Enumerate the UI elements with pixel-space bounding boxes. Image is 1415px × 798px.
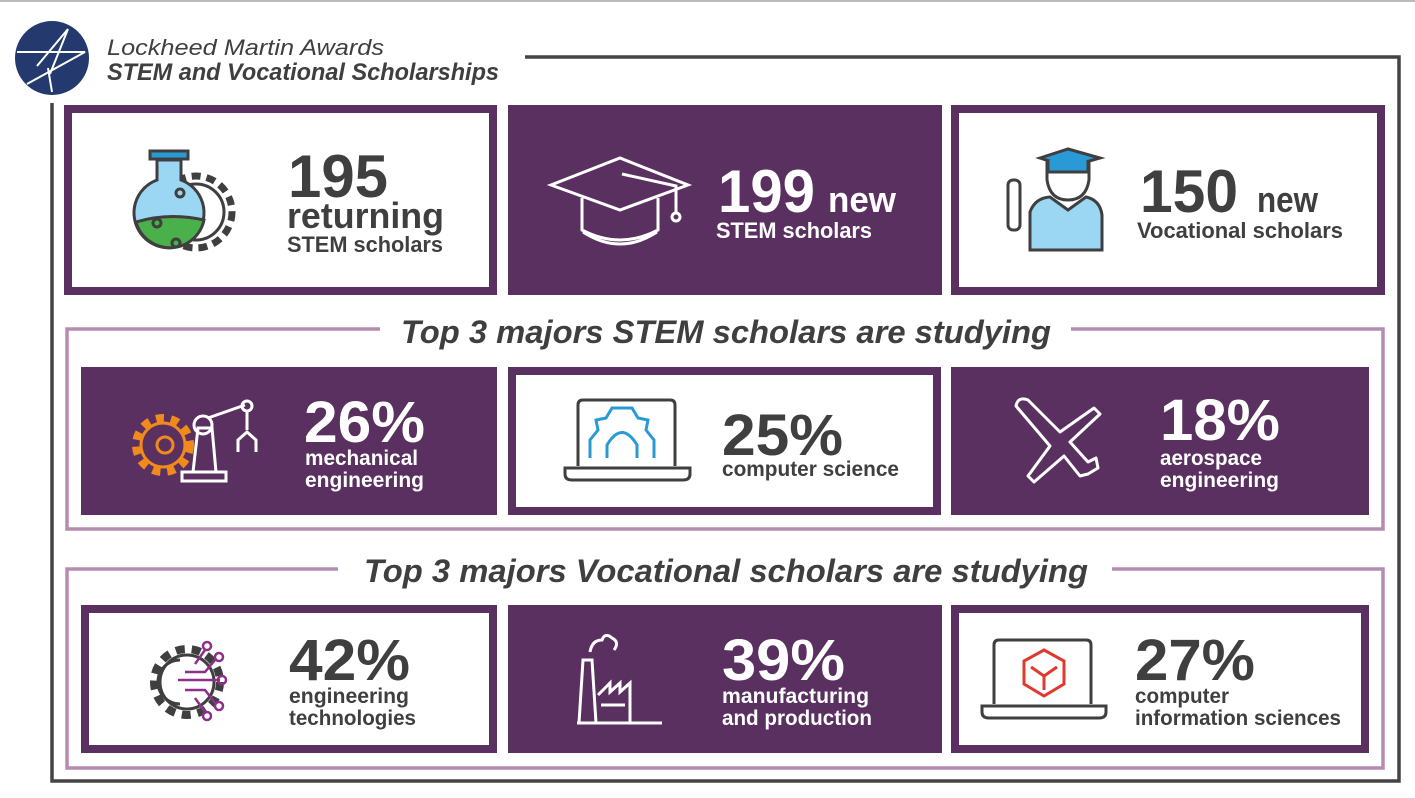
stat text: 195 xyxy=(288,143,388,210)
card: computer science xyxy=(512,371,937,511)
card: computer information sciences xyxy=(955,609,1365,749)
card: manufacturing: manufacturing xyxy=(722,685,869,708)
card: engineering technologies: 42% xyxy=(289,628,410,693)
header title xyxy=(107,35,499,86)
card: manufacturing: 39% xyxy=(722,628,845,693)
heading: Top 3 majors STEM scholars are studying xyxy=(401,314,1051,350)
card: computer science: 25% xyxy=(722,403,843,468)
icon: graduate xyxy=(1008,149,1102,250)
header title: STEM and Vocational Scholarships xyxy=(107,59,499,86)
icon: grad cap xyxy=(551,158,688,244)
card: 199 new: STEM scholars xyxy=(716,218,872,243)
card: computer information sciences: computer xyxy=(1135,685,1229,708)
card: engineering technologies: technologies xyxy=(289,707,416,730)
card: 199 new: new xyxy=(828,179,897,220)
card: mechanical: engineering xyxy=(305,469,424,492)
card: aerospace: aerospace xyxy=(1160,447,1262,470)
card: 150 new: new xyxy=(1257,179,1319,220)
panel: STEM majors xyxy=(67,314,1383,529)
card: 150 new xyxy=(955,109,1381,291)
card: 199 new: 199 xyxy=(718,158,815,225)
card: mechanical: 26% xyxy=(304,390,425,455)
stat text xyxy=(287,143,444,257)
card: computer science: computer science xyxy=(722,458,899,481)
card: engineering technologies: engineering xyxy=(289,685,409,708)
card: mechanical: mechanical xyxy=(305,447,418,470)
card: aerospace: 18% xyxy=(1160,388,1280,453)
card: manufacturing xyxy=(508,605,942,753)
card: engineering technologies xyxy=(85,609,493,749)
card: aerospace xyxy=(951,367,1369,515)
card: computer information sciences: information sciences xyxy=(1135,707,1341,730)
header title: Lockheed Martin Awards xyxy=(107,35,384,60)
card: computer information sciences: 27% xyxy=(1135,628,1255,693)
stat text: STEM scholars xyxy=(287,232,443,257)
heading: Top 3 majors Vocational scholars are studying xyxy=(364,553,1088,589)
card: 199 new xyxy=(508,105,942,295)
card: 150 new: Vocational scholars xyxy=(1137,218,1343,243)
card: 150 new: 150 xyxy=(1140,158,1238,225)
logo xyxy=(15,21,89,95)
stat text: returning xyxy=(287,195,444,236)
card: 195 returning xyxy=(68,109,493,291)
card: aerospace: engineering xyxy=(1160,469,1279,492)
icon: flask and gear xyxy=(134,151,232,248)
card: manufacturing: and production xyxy=(722,707,872,730)
card: mechanical xyxy=(81,367,497,515)
panel: Vocational majors xyxy=(67,553,1383,768)
